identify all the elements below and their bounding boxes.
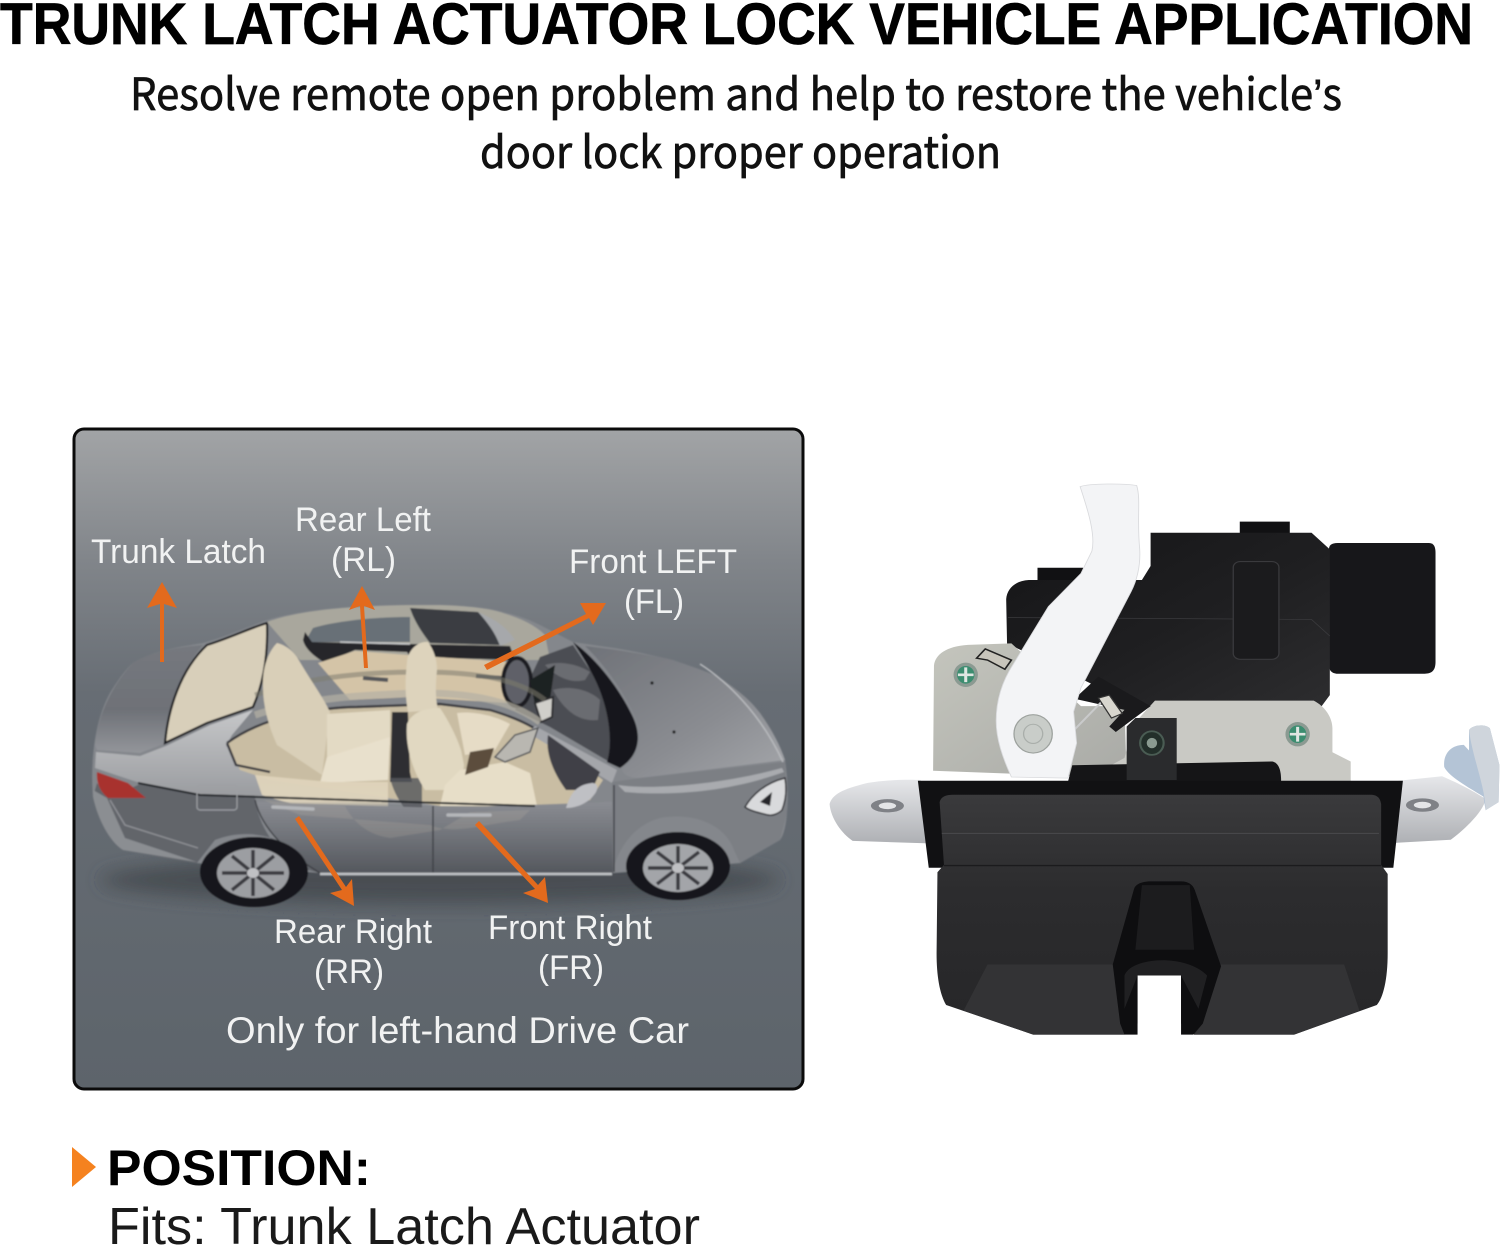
label: trunk latch: Trunk Latch bbox=[91, 533, 266, 571]
rear window bbox=[165, 623, 267, 743]
label: rear right: (RR) bbox=[314, 953, 384, 991]
label: front left: (FL) bbox=[624, 583, 684, 621]
latch body bbox=[937, 795, 1388, 1035]
centre console bbox=[390, 712, 412, 782]
heading text: POSITION: bbox=[107, 1140, 371, 1196]
left flange bbox=[830, 780, 929, 843]
connector bbox=[1329, 543, 1436, 674]
icon: orange triangle bbox=[72, 1147, 96, 1187]
trunk lid bbox=[95, 645, 203, 753]
left rivet clip bbox=[977, 649, 1011, 669]
door handles bbox=[273, 807, 490, 815]
door seams bbox=[255, 785, 614, 873]
front wheel bbox=[626, 832, 730, 900]
arrow: rear left bbox=[349, 586, 375, 668]
A pillar bbox=[528, 726, 617, 783]
near window frame bbox=[227, 704, 537, 772]
character line bbox=[138, 783, 535, 806]
label: rear left: Rear Left bbox=[295, 501, 432, 539]
car illustration bbox=[92, 605, 788, 907]
label: front right: (FR) bbox=[538, 949, 604, 987]
dark latch slot bbox=[1068, 762, 1281, 782]
black arm bbox=[1074, 677, 1151, 732]
arrow: trunk latch bbox=[147, 582, 177, 662]
doors bbox=[255, 802, 613, 873]
roof rail ghost bbox=[255, 672, 545, 700]
roof glass bbox=[267, 605, 550, 660]
far door trim bbox=[318, 651, 540, 705]
right flange bbox=[1386, 776, 1486, 843]
interior near window bbox=[227, 704, 603, 807]
steering wheel bbox=[503, 658, 531, 706]
label: rear right: Rear Right bbox=[274, 913, 433, 951]
label: rear left bbox=[295, 501, 432, 579]
bracket bbox=[1127, 718, 1177, 780]
rear quarter lower bbox=[93, 783, 320, 873]
panel: vehicle door positions bbox=[74, 429, 803, 1089]
centre slot bbox=[1113, 881, 1221, 1035]
spring bbox=[1046, 701, 1103, 776]
windshield pillar band bbox=[573, 642, 638, 768]
hood bbox=[585, 646, 785, 778]
screw: right bbox=[1285, 722, 1310, 746]
tail light bbox=[97, 772, 146, 798]
body crease bbox=[942, 832, 1379, 835]
white lever bbox=[996, 484, 1140, 778]
housing bbox=[1006, 533, 1330, 708]
shoulder panel bbox=[95, 710, 440, 806]
rear wheel bbox=[200, 837, 308, 907]
mirror bbox=[566, 783, 597, 808]
subtitle: door lock proper operation bbox=[480, 117, 1001, 181]
sill bbox=[320, 873, 612, 875]
arrow: front left bbox=[484, 603, 606, 670]
housing recess bbox=[1233, 562, 1279, 659]
position heading bbox=[72, 1140, 371, 1196]
label: rear left: (RL) bbox=[331, 541, 396, 579]
housing tabs bbox=[1038, 522, 1290, 583]
front seat bbox=[406, 642, 538, 806]
product photo: trunk latch actuator bbox=[830, 484, 1499, 1035]
rear seat bbox=[255, 643, 390, 811]
label: front right: Front Right bbox=[488, 909, 653, 947]
car body base bbox=[92, 605, 788, 873]
arrow: rear right bbox=[295, 816, 354, 906]
left metal plate bbox=[933, 643, 1127, 778]
far window band bbox=[303, 632, 515, 663]
right metal plate bbox=[1081, 701, 1351, 782]
label: front right bbox=[488, 909, 653, 987]
hook bbox=[1444, 725, 1499, 810]
label: front left: Front LEFT bbox=[569, 543, 737, 581]
label: rear right bbox=[274, 913, 433, 991]
fuel door bbox=[197, 785, 237, 810]
dash bbox=[515, 645, 618, 767]
air vent bbox=[535, 697, 553, 722]
subtitle bbox=[130, 59, 1342, 181]
pivot pin bbox=[1014, 715, 1052, 753]
note: left-hand drive: Only for left-hand Drive Car bbox=[226, 1010, 689, 1051]
sunroof bbox=[305, 617, 410, 642]
screw: left bbox=[954, 663, 978, 687]
panel background bbox=[74, 429, 803, 1089]
label: front left bbox=[569, 543, 737, 621]
front fender bbox=[612, 762, 787, 870]
upper cover bbox=[918, 781, 1403, 868]
lower facets bbox=[964, 964, 1124, 1035]
arrow: front right bbox=[475, 821, 548, 903]
headlight bbox=[745, 778, 786, 815]
subtitle: Resolve remote open problem and help to restore the vehicle’s bbox=[130, 59, 1342, 123]
